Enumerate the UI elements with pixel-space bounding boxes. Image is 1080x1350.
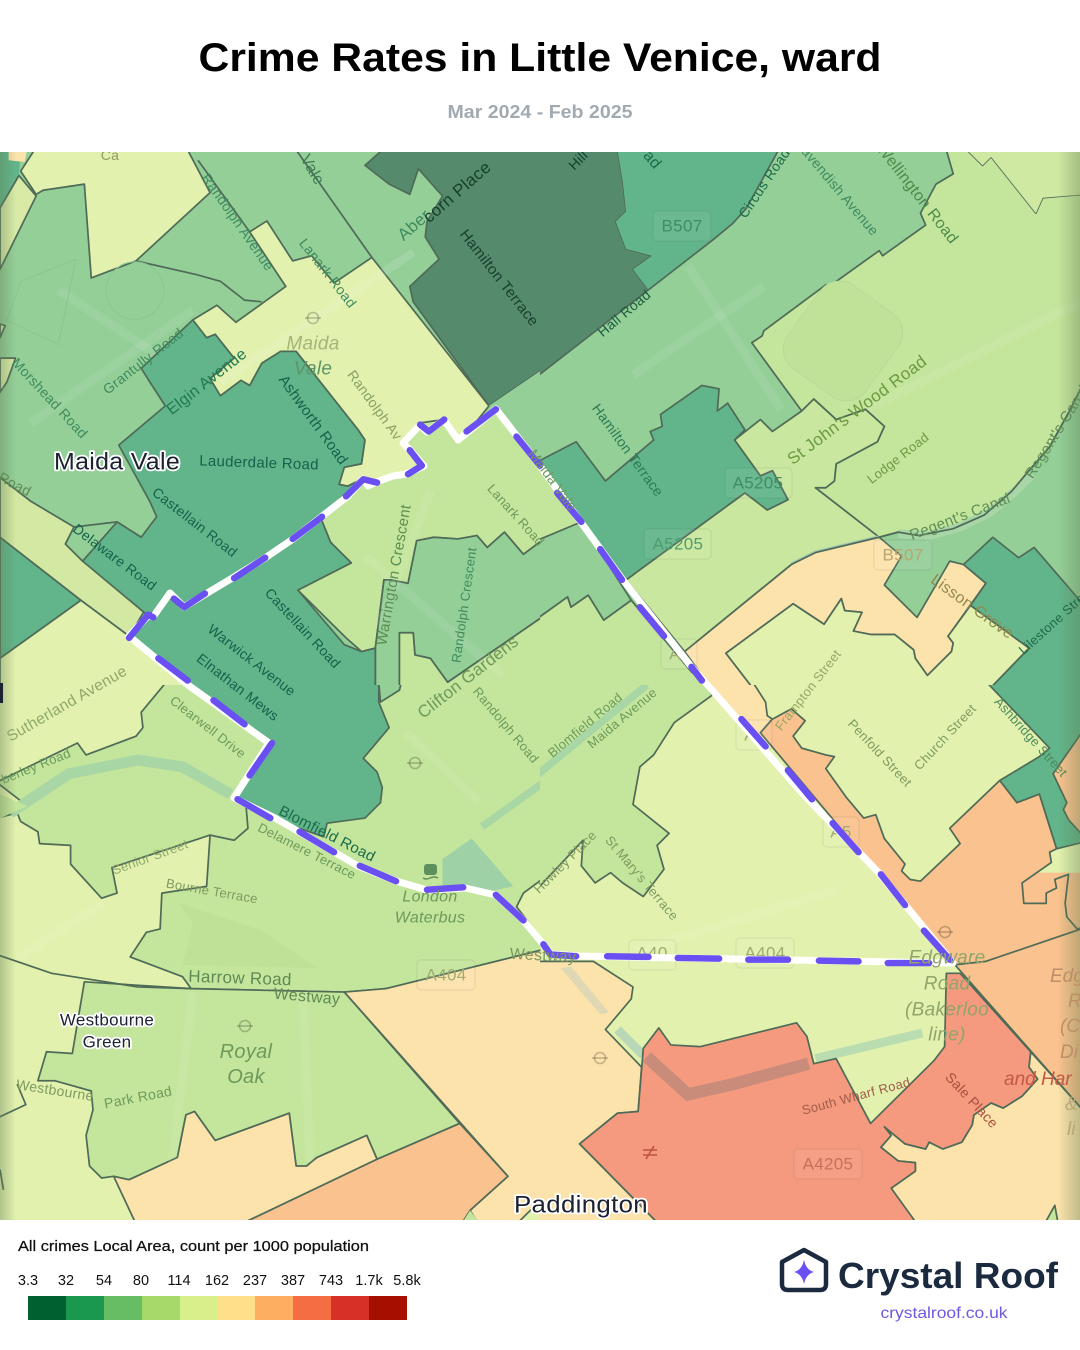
clipped place label at left edge <box>0 683 3 703</box>
road labels: Randolph Av <box>344 367 406 443</box>
shield: B507 east <box>874 540 932 570</box>
road labels: Cavendish Avenue <box>792 135 882 239</box>
road labels: Lauderdale Road <box>199 452 319 474</box>
road labels: St Mary's Terrace <box>602 833 682 923</box>
map quadrant: north-east <box>537 150 1080 689</box>
place labels in italics: Vale <box>294 358 332 380</box>
road labels: Sutherland Avenue <box>4 663 130 745</box>
icon: house with star <box>782 1250 826 1290</box>
road labels: Delamere Terrace <box>256 820 358 882</box>
legend scale values: 237 <box>243 1273 267 1289</box>
place labels in italics: Edgware <box>908 948 986 968</box>
legend scale values: 743 <box>319 1273 343 1289</box>
road labels: Howley Place <box>531 828 599 896</box>
road labels: Lanark Road <box>484 481 548 549</box>
place labels in italics: Maida <box>286 334 340 354</box>
map edge vignette <box>0 152 1080 1220</box>
road labels: Elnathan Mews <box>194 650 282 724</box>
place labels in italics: and Har <box>1004 1069 1072 1090</box>
map quadrant: south-west <box>0 683 544 1224</box>
icon: waterbus <box>423 864 438 879</box>
legend scale values: 54 <box>96 1273 112 1289</box>
shield: A road near ward edge: A <box>669 644 681 664</box>
road labels: Blomfield Road <box>276 802 378 866</box>
place labels in italics: Oak <box>227 1066 265 1088</box>
label: Maida Vale: Maida Vale <box>54 448 180 476</box>
icon: tube roundel Warwick Avenue <box>407 758 423 768</box>
road labels: berley Road <box>0 745 73 787</box>
road labels: Westway <box>273 986 341 1008</box>
place labels in italics: line) <box>928 1024 966 1046</box>
legend scale values: 5.8k <box>393 1273 421 1289</box>
road labels: Maida Avenue <box>584 685 660 751</box>
road labels: Park Road <box>103 1083 173 1111</box>
road labels: Sale Place <box>942 1069 1002 1131</box>
map quadrant: north-west <box>0 150 544 689</box>
road labels: Ashworth Road <box>275 372 351 468</box>
icon: tube roundel Maida Vale <box>305 312 321 324</box>
road labels: St John's Wood Road <box>784 351 930 469</box>
shield: A4205 <box>794 1149 862 1179</box>
shield: A5205 south <box>644 529 711 559</box>
shield: B507 north <box>653 211 711 241</box>
map quadrant: south-east <box>537 683 1080 1224</box>
road labels: Westway <box>509 946 577 966</box>
place labels in italics: & <box>1065 1094 1078 1115</box>
road labels: Bourne Terrace <box>165 876 259 906</box>
legend scale values: 32 <box>58 1273 74 1289</box>
road labels: Westbourne <box>15 1076 95 1104</box>
road labels: Ashbridge Street <box>991 694 1071 780</box>
shield: A404 east <box>736 938 794 968</box>
ward boundary: Little Venice <box>129 409 953 963</box>
road labels: Randolph Road <box>470 684 542 766</box>
road labels: Delaware Road <box>70 520 160 594</box>
shield: A404 east: A404 <box>745 944 785 962</box>
road labels: Harrow Road <box>188 967 292 989</box>
place labels in italics: (C <box>1060 1016 1080 1037</box>
shield: A40 <box>629 940 676 970</box>
road labels: Elgin Avenue <box>164 346 250 418</box>
road labels: Hamilton Terrace <box>456 226 542 330</box>
road labels: Regent's Canal <box>907 490 1013 544</box>
road labels: Hall Road <box>594 286 654 340</box>
legend <box>18 1239 421 1320</box>
road labels: Church Street <box>911 701 979 773</box>
place labels in italics: London <box>402 888 458 906</box>
road labels: Senior Street <box>110 836 190 878</box>
icon: rail Paddington <box>643 1146 657 1159</box>
legend scale values: 162 <box>205 1273 229 1289</box>
place labels in italics: li <box>1067 1119 1076 1140</box>
road labels: Wellington Road <box>873 141 961 247</box>
shield: B507 east: B507 <box>883 546 923 564</box>
legend scale values <box>18 1273 421 1289</box>
shield: A404 west: A404 <box>426 966 466 984</box>
logo: Crystal Roof <box>782 1250 1059 1322</box>
shield: A road near ward edge <box>661 639 697 669</box>
road labels: Frampton Street <box>772 647 844 733</box>
shield: A4205: A4205 <box>803 1154 853 1174</box>
road labels: Morshead Road <box>9 355 91 441</box>
place labels in italics: Royal <box>220 1041 273 1063</box>
wordmark: Crystal Roof <box>838 1255 1059 1296</box>
label: Westbourne Green <box>60 1010 154 1052</box>
road labels: South Wharf Road <box>800 1074 912 1118</box>
road labels: Warwick Avenue <box>205 621 299 699</box>
road labels: Hamilton Terrace <box>589 401 667 499</box>
road shields <box>417 211 932 1179</box>
legend scale values: 80 <box>133 1273 149 1289</box>
road labels: Maida Vale <box>525 446 581 514</box>
label: Paddington: Paddington <box>514 1192 648 1218</box>
shield: A5205 south: A5205 <box>653 534 703 554</box>
icon: tube roundel Royal Oak <box>237 1020 253 1032</box>
shield: A5: A5 <box>830 822 852 842</box>
legend colour swatches <box>28 1296 407 1320</box>
icon: tube roundel Paddington <box>592 1052 608 1064</box>
road labels: Hill <box>565 147 591 173</box>
title: Crime Rates in Little Venice, ward <box>198 36 882 80</box>
legend scale values: 387 <box>281 1273 305 1289</box>
road labels: Penfold Street <box>845 716 915 790</box>
road labels: Vale <box>297 152 327 188</box>
label: Westbourne Green: Westbourne <box>60 1010 154 1030</box>
shield: A40: A40 <box>636 944 668 962</box>
subtitle: date range: Mar 2024 - Feb 2025 <box>448 102 632 122</box>
website url: crystalroof.co.uk <box>880 1305 1009 1322</box>
road labels: Warrington Crescent <box>373 503 415 647</box>
label: Westbourne Green: Green <box>83 1032 131 1052</box>
legend scale values: 114 <box>167 1273 191 1289</box>
legend scale values: 1.7k <box>355 1273 383 1289</box>
road labels: Castellain Road <box>262 585 344 671</box>
shield: A5205 east: A5205 <box>733 474 783 492</box>
road labels: Blomfield Road <box>545 690 625 760</box>
road labels: Castellain Road <box>149 484 241 560</box>
icon: tube roundel Edgware Road <box>937 926 953 938</box>
road labels: Aber <box>394 206 434 244</box>
road labels: Randolph Crescent <box>448 546 480 664</box>
road labels: Clifton Gardens <box>414 632 522 722</box>
icons: tube and rail stations <box>237 312 953 1159</box>
road labels: Lanark Road <box>296 235 360 311</box>
shield: A road near Frampton Street <box>736 720 772 750</box>
road labels: Grantully Road <box>100 325 186 397</box>
road labels: ad <box>640 147 664 173</box>
road labels: Clearwell Drive <box>167 693 249 761</box>
place labels in italics: Waterbus <box>395 910 465 926</box>
shield: A5205 east <box>725 468 792 498</box>
legend scale values: 3.3 <box>18 1273 38 1289</box>
road labels: Circus Road <box>735 145 793 221</box>
place labels in italics: (Bakerloo <box>905 1000 989 1020</box>
shield: B507 north: B507 <box>662 216 702 236</box>
road labels: Randolph Avenue <box>199 170 277 274</box>
place labels in italics <box>220 334 1080 1140</box>
shield: A road near Frampton Street: A <box>744 726 756 744</box>
road labels: Ca <box>101 147 119 163</box>
place labels in italics: Road <box>924 974 971 994</box>
legend heading: All crimes Local Area, count per 1000 population <box>18 1239 369 1255</box>
road labels: Lisson Grove <box>927 571 1017 643</box>
shield: A404 west <box>417 960 475 990</box>
shield: A5 <box>823 817 859 847</box>
place labels in italics: Di <box>1060 1042 1079 1063</box>
road labels: Lodge Road <box>864 429 932 487</box>
road labels: corn Place <box>419 157 495 227</box>
